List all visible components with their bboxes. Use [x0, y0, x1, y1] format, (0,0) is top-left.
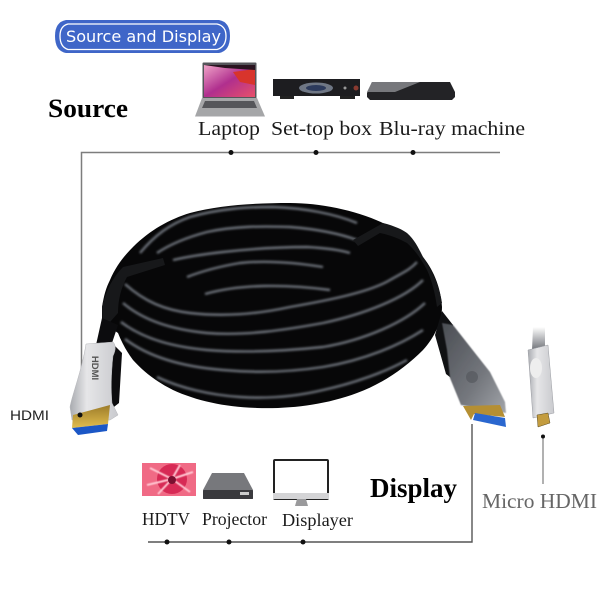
- icon: Blu-ray machine: [367, 82, 455, 100]
- label: Projector: Projector: [202, 509, 267, 529]
- micro HDMI connector: [528, 327, 554, 427]
- icon: projector: [203, 473, 253, 499]
- display connection line: [148, 424, 472, 544]
- title badge: Source and Display: Source and Display: [66, 27, 221, 46]
- label: Displayer: Displayer: [282, 510, 353, 530]
- heading: Display: Display: [370, 473, 457, 503]
- label: Set-top box: Set-top box: [271, 118, 372, 140]
- source connection line: [82, 150, 500, 415]
- icon: set-top box: [273, 79, 360, 99]
- title badge: Source and Display: [55, 20, 230, 53]
- pointer line to micro HDMI: [541, 434, 545, 484]
- velcro strap right: [353, 223, 442, 307]
- velcro strap left: [102, 258, 165, 330]
- icon: displayer: [273, 460, 329, 506]
- coiled black cable: [102, 203, 442, 408]
- label: Blu-ray machine: Blu-ray machine: [379, 118, 525, 140]
- label: HDMI: HDMI: [10, 407, 49, 423]
- label: Laptop: Laptop: [198, 118, 260, 140]
- left HDMI connector: [70, 318, 122, 435]
- label: Micro HDMI: Micro HDMI: [482, 489, 597, 513]
- heading: Source: Source: [48, 94, 128, 123]
- icon: HDTV: [142, 463, 196, 496]
- right HDMI connector: [435, 311, 506, 427]
- label: HDTV: HDTV: [142, 509, 190, 529]
- icon: laptop: [195, 62, 265, 116]
- left HDMI connector: HDMI: [89, 356, 100, 380]
